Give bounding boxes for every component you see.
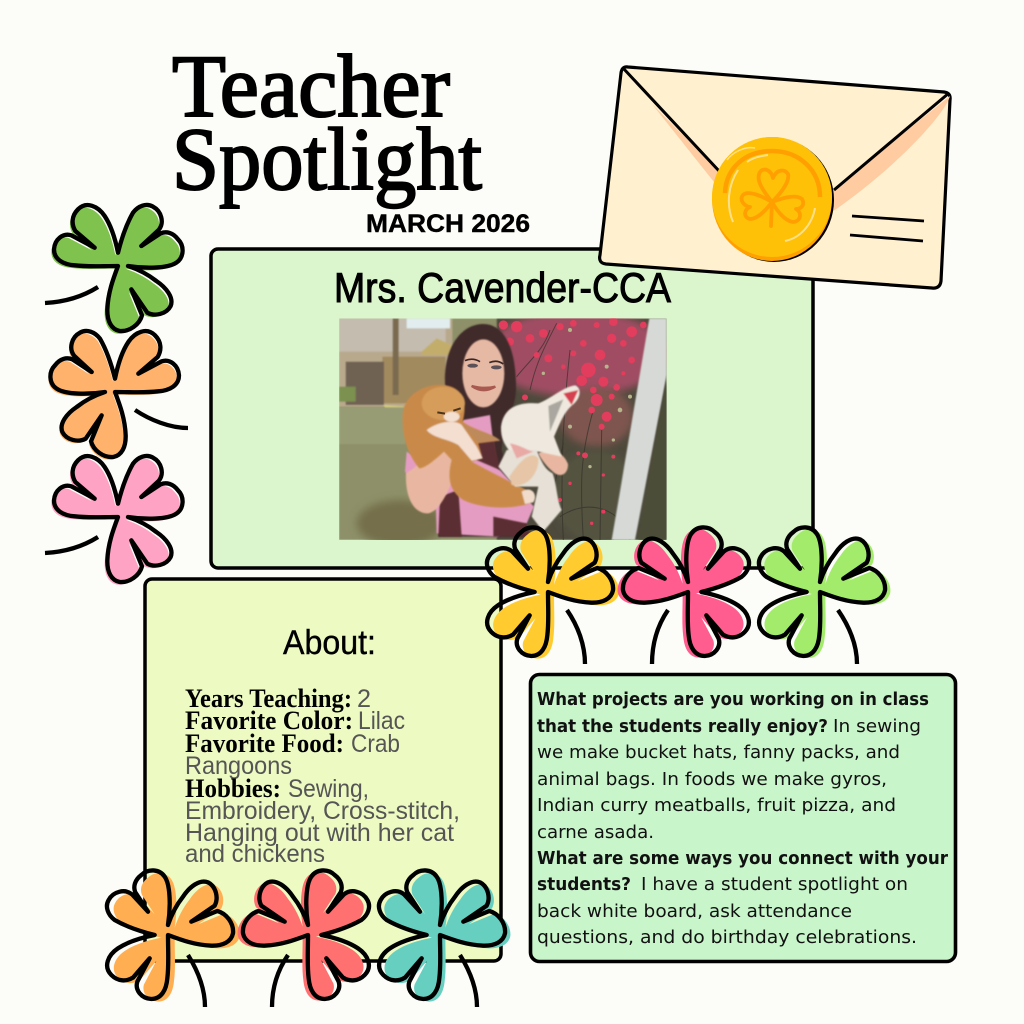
shamrock emblem [742,170,803,226]
about facts: Rangoons [185,752,292,780]
branches [516,323,630,540]
address lines [850,216,924,241]
about facts: Embroidery, Cross-stitch, [185,797,460,825]
gaps of light in the bush [542,328,632,468]
panel: interview questions [530,674,956,962]
about facts: Hanging out with her cat [185,819,454,847]
about facts: Lilac [358,707,405,735]
question two and answer: What are some ways you connect with your [537,848,948,869]
about facts: Favorite Food: [185,729,344,758]
question two and answer: I have a student spotlight on [641,874,908,895]
flap shadow [652,96,950,212]
icon: hot pink clover [618,527,749,664]
question two and answer: back white board, ask attendance [537,901,852,922]
shirt [405,415,534,537]
question two and answer [537,848,948,948]
question one and answer: Indian curry meatballs, fruit pizza, and [537,795,896,816]
question two and answer: students? [537,874,631,895]
about facts: 2 [357,685,371,713]
icon: coral clover, lower row [238,870,369,1007]
about facts: Hobbies: [185,774,281,803]
about facts: Sewing, [288,775,369,803]
face [462,339,504,407]
photo: teacher holding a cat and a chicken [339,310,667,547]
about heading: About: [283,624,376,662]
gold coin seal [712,137,834,262]
title: Spotlight [172,111,482,209]
cat [403,385,535,507]
question one and answer: In sewing [833,716,921,737]
fence post [612,318,667,540]
icon: orange clover [48,331,188,460]
icon: orange clover, lower row [107,870,240,1007]
icon: green clover [45,205,183,334]
icon: lime clover [759,527,890,664]
about facts: Favorite Color: [185,706,353,735]
hair [438,324,527,537]
about facts: Crab [351,730,400,758]
question one and answer [537,689,929,843]
icon: yellow clover [487,527,619,664]
chicken [498,385,580,532]
question one and answer: we make bucket hats, fanny packs, and [537,742,900,763]
teacher name: Mrs. Cavender-CCA [334,264,671,311]
about facts [185,684,460,868]
icon: teal clover, lower row [379,870,510,1007]
question one and answer: animal bags. In foods we make gyros, [537,769,887,790]
question one and answer: carne asada. [537,822,654,843]
title: Teacher [172,38,450,136]
panel: teacher name and photo [211,249,813,568]
blossoms [499,317,655,525]
question two and answer: questions, and do birthday celebrations. [537,927,917,948]
icon: envelope with gold shamrock seal [600,67,950,288]
about facts: Years Teaching: [185,684,352,713]
title [172,38,482,209]
about facts: and chickens [185,840,325,868]
panel: about [145,579,501,961]
flap lines [623,68,949,190]
envelope body [600,67,950,288]
icon: pink clover [45,456,183,585]
question one and answer: What projects are you working on in class [537,689,929,710]
date subtitle: MARCH 2026 [366,210,530,238]
question one and answer: that the students really enjoy? [537,716,828,737]
arms [405,452,569,514]
bush background [497,318,667,540]
